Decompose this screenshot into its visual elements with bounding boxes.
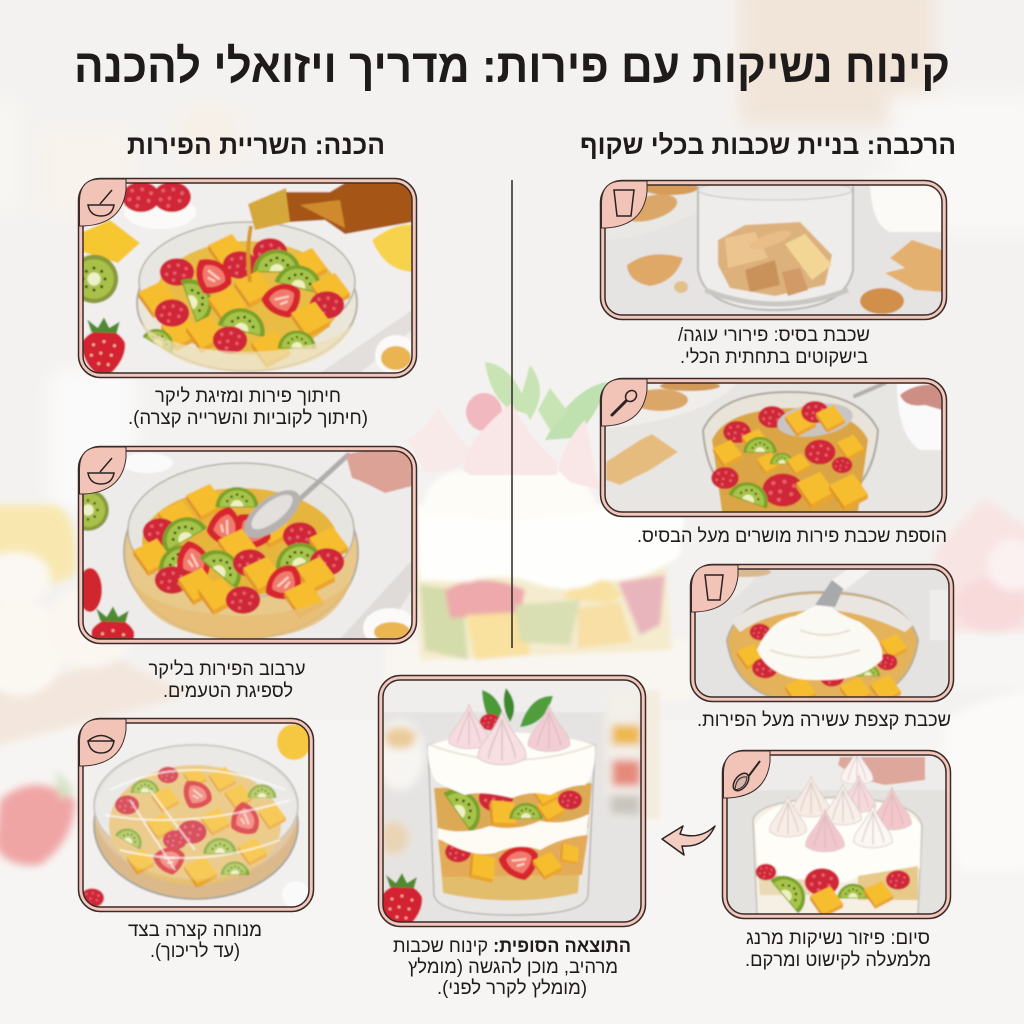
caption: final result: התוצאה הסופית: קינוח שכבות xyxy=(393,936,631,957)
caption: mix fruit: ערבוב הפירות בליקר xyxy=(148,659,306,680)
panel: base layer xyxy=(600,180,946,320)
caption: mix fruit second line: לספיגת הטעמים. xyxy=(163,681,293,702)
caption: rest: מנוחה קצרה בצד xyxy=(128,920,262,941)
caption: cut fruit: חיתוך פירות ומזיגת ליקר xyxy=(155,386,341,407)
panel: mix fruit xyxy=(78,446,418,644)
icon: covered bowl xyxy=(80,719,126,766)
panel: final result xyxy=(376,676,646,930)
caption: rest second line: (עד לריכוך). xyxy=(150,941,240,962)
caption: final result third line: (מומלץ לקרר לפני). xyxy=(437,978,587,999)
caption: meringue second line: מלמעלה לקישוט ומרקם. xyxy=(745,950,931,971)
panel: meringue topping xyxy=(722,749,950,918)
caption: cream layer: שכבת קצפת עשירה מעל הפירות. xyxy=(697,710,951,731)
panel: fruit layer xyxy=(600,378,946,516)
icon: glass xyxy=(602,181,647,228)
heading: preparation column: הכנה: השריית הפירות xyxy=(127,130,385,160)
panel: rest the fruit xyxy=(78,718,314,912)
icon: glass xyxy=(692,565,738,612)
panel: cut fruit and pour liqueur xyxy=(70,178,417,378)
panel: cream layer xyxy=(690,564,954,707)
arrow to final result xyxy=(662,826,715,855)
heading: assembly column: הרכבה: בניית שכבות בכלי שקוף xyxy=(580,130,956,160)
icon: bowl with spoon xyxy=(80,179,126,226)
icon: whisk xyxy=(724,751,770,798)
caption: final result second line: מרהיב, מוכן להגשה (מומלץ xyxy=(408,957,618,978)
icon: bowl with spoon xyxy=(80,447,126,494)
caption: meringue: סיום: פיזור נשיקות מרנג xyxy=(746,928,930,949)
title: קינוח נשיקות עם פירות: מדריך ויזואלי להכנה xyxy=(74,39,950,92)
icon: spoon xyxy=(602,379,647,426)
caption: fruit layer: הוספת שכבת פירות מושרים מעל הבסיס. xyxy=(637,526,947,547)
caption: base layer second line: בישקוטים בתחתית הכלי. xyxy=(680,347,868,368)
caption: cut fruit second line: (חיתוך לקוביות והשרייה קצרה). xyxy=(128,408,368,429)
caption: base layer: שכבת בסיס: פירורי עוגה/ xyxy=(678,325,870,346)
second cream layer xyxy=(438,814,589,854)
